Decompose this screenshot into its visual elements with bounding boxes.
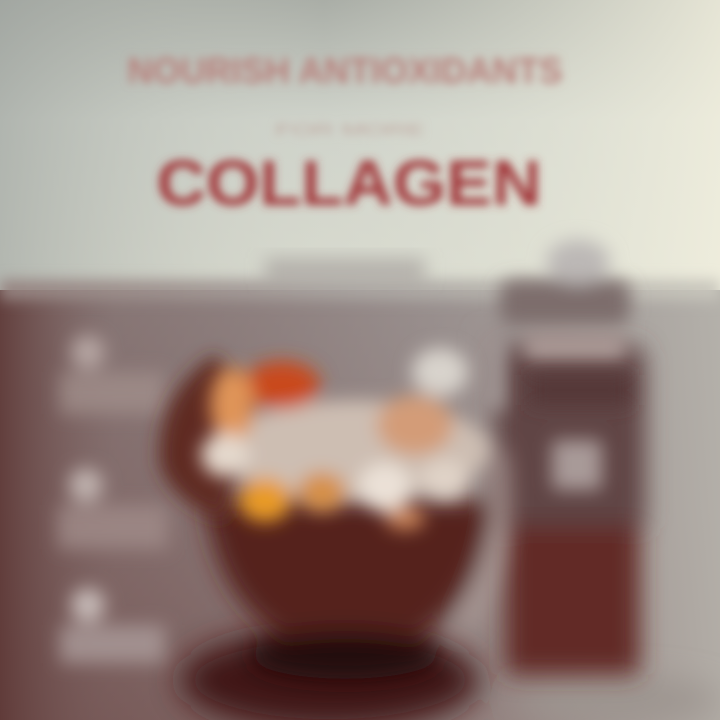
background: lower table <box>0 280 720 720</box>
item 3 <box>60 588 165 663</box>
item 2 <box>58 468 168 549</box>
table shadow <box>180 630 720 720</box>
title: small upper line: NOURISH ANTIOXIDANTS <box>128 50 562 91</box>
jar <box>478 240 645 675</box>
fruit and cream <box>201 348 490 530</box>
jar label <box>530 375 630 490</box>
halved shell <box>160 355 250 520</box>
title: COLLAGEN: COLLAGEN <box>156 147 542 219</box>
jar shadow and body <box>495 345 645 675</box>
item 1 <box>60 335 165 414</box>
background: upper wall <box>0 0 720 300</box>
jar lid <box>478 240 630 410</box>
subtitle: faint line: FOR MORE <box>275 122 425 139</box>
bowl <box>160 348 502 679</box>
bowl body <box>205 450 502 679</box>
caption above bowl <box>265 258 425 284</box>
panel: benefits list <box>58 335 168 663</box>
